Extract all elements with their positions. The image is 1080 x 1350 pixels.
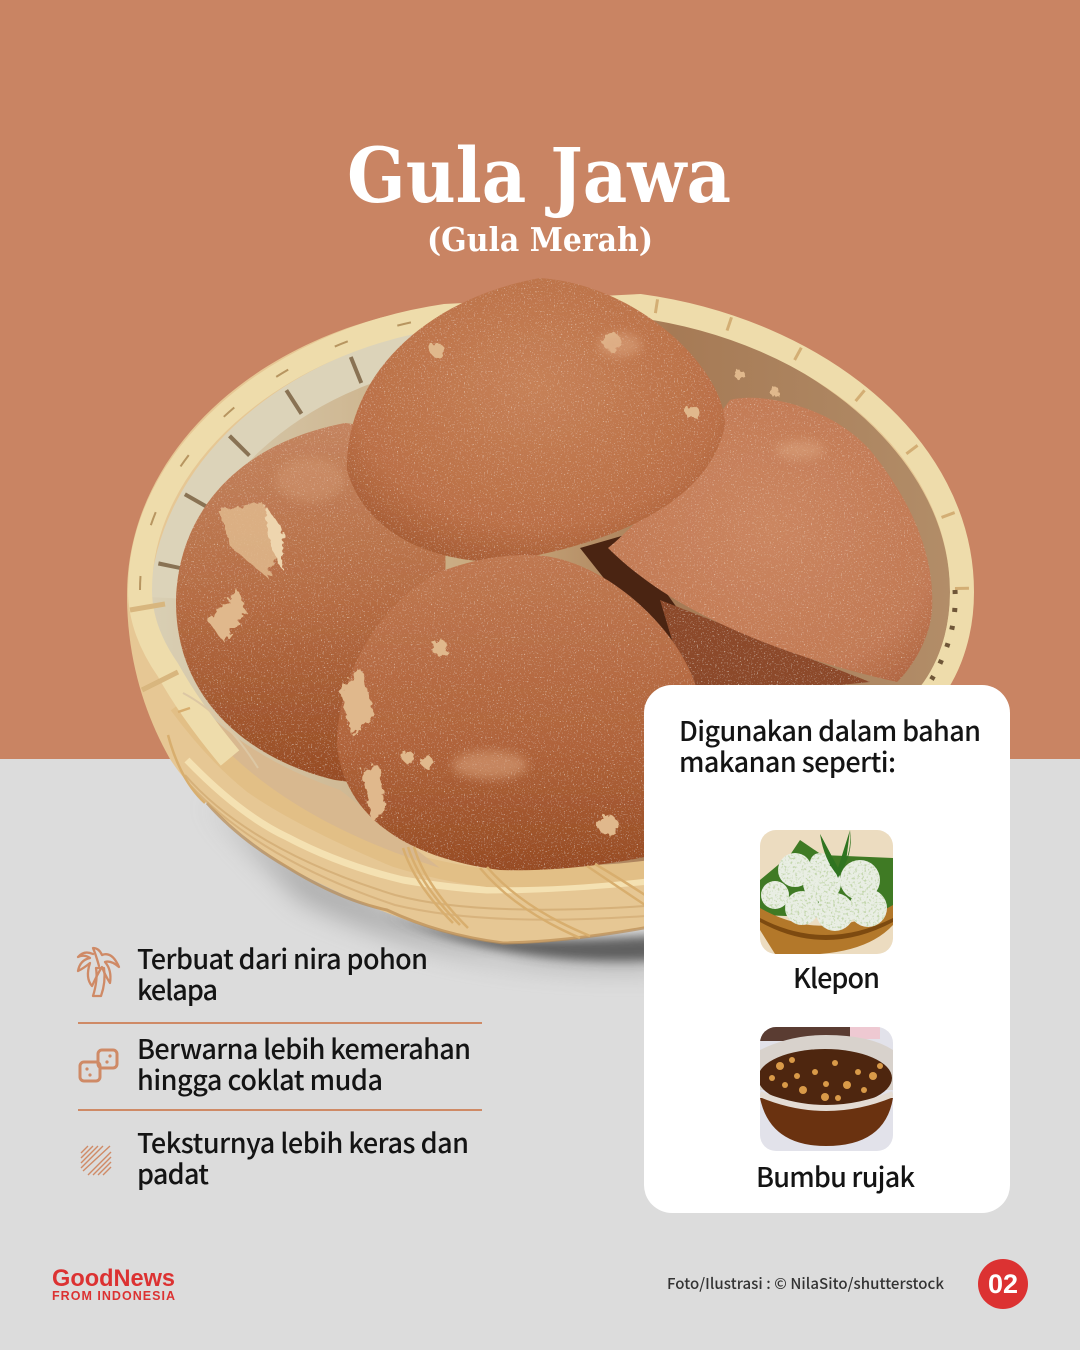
- panel background: [644, 685, 1010, 1213]
- sugar: left dome: [176, 423, 446, 782]
- gap shadow between pieces: [580, 535, 700, 700]
- page number badge: 02: [988, 1269, 1018, 1299]
- photo: klepon: [760, 830, 893, 954]
- sugar: front dome: [337, 555, 697, 870]
- fact 3 text: Teksturnya lebih keras dan: [137, 1122, 469, 1161]
- stray fibre: [183, 693, 258, 768]
- basket woven inner band: [178, 705, 660, 878]
- illustration: woven basket with palm sugar: [127, 278, 973, 969]
- basket rattan bindings: [168, 708, 645, 938]
- icon: hatched texture: [81, 1146, 111, 1175]
- sugar soft highlights: [275, 333, 825, 779]
- divider: [78, 1109, 482, 1111]
- title: Gula Jawa: [347, 131, 731, 220]
- icon: colour dice: [80, 1050, 117, 1081]
- fact 2 text: Berwarna lebih kemerahan: [137, 1028, 471, 1067]
- footer logo: GoodNews: [52, 1265, 175, 1292]
- panel heading: Digunakan dalam bahan: [679, 710, 981, 749]
- subtitle: (Gula Merah): [427, 220, 653, 259]
- label: bumbu rujak: Bumbu rujak: [756, 1156, 915, 1195]
- basket shadow: [205, 800, 660, 969]
- sugar: top dome: [347, 278, 725, 562]
- photo credit: Foto/Ilustrasi : © NilaSito/shutterstock: [667, 1273, 944, 1294]
- divider: [78, 1022, 482, 1024]
- label: klepon: Klepon: [793, 957, 880, 996]
- footer logo: FROM INDONESIA: [52, 1289, 175, 1303]
- background: terracotta top band: [0, 0, 1080, 759]
- sugar: back right chunk: [660, 600, 870, 700]
- fact 1 text: Terbuat dari nira pohon: [137, 938, 428, 977]
- fact 2 text: hingga coklat muda: [137, 1059, 383, 1098]
- page number badge: [978, 1259, 1028, 1309]
- panel: used in foods: [644, 685, 1010, 1213]
- basket rim highlight: [140, 306, 962, 758]
- fact 1 text: kelapa: [137, 969, 218, 1008]
- sugar crystal patches: [207, 333, 780, 835]
- basket rim weave marks: [130, 306, 962, 690]
- basket outer wall and rim: [127, 297, 973, 943]
- photo: bumbu rujak: [758, 1027, 893, 1151]
- panel heading: makanan seperti:: [679, 741, 896, 780]
- icon: palm tree: [78, 948, 119, 996]
- fact 3 text: padat: [137, 1153, 209, 1192]
- fact list: [78, 938, 482, 1192]
- background: grey lower band: [0, 759, 1080, 1350]
- basket inner wall and floor: [152, 318, 950, 868]
- sugar: right dome: [608, 398, 932, 682]
